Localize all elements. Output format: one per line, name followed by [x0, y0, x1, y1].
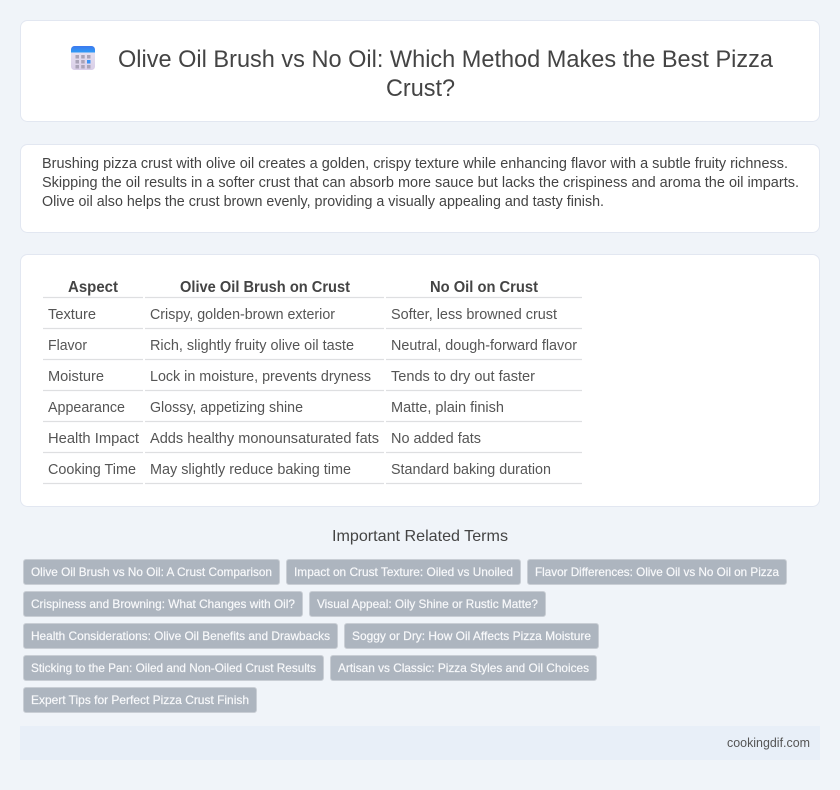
heading: important related terms: Important Related Terms — [332, 528, 508, 545]
tag: Olive Oil Brush vs No Oil: A Crust Comparison — [31, 565, 272, 579]
icon: calendar — [71, 46, 95, 70]
tag: Artisan vs Classic: Pizza Styles and Oil Choices — [338, 661, 589, 675]
title — [118, 46, 774, 102]
row: health impact — [48, 431, 481, 447]
tag — [330, 656, 596, 680]
row: appearance: Appearance — [48, 400, 125, 416]
tag: Crispiness and Browning: What Changes with Oil? — [31, 597, 295, 611]
row: flavor: Neutral, dough-forward flavor — [391, 338, 577, 354]
tag — [344, 624, 598, 648]
panel: comparison table — [20, 254, 820, 506]
row: flavor — [48, 338, 577, 354]
tag: Impact on Crust Texture: Oiled vs Unoiled — [294, 565, 513, 579]
tag group: related terms — [24, 560, 786, 712]
row: texture: Texture — [48, 307, 96, 323]
text block: description: Olive oil also helps the crust brown evenly, providing a visually appealing and tasty finish. — [42, 194, 604, 210]
row: appearance — [48, 400, 504, 416]
text block: description — [42, 156, 799, 210]
row: appearance: Matte, plain finish — [391, 400, 504, 416]
tag — [24, 560, 280, 584]
row: health impact: Adds healthy monounsaturated fats — [150, 431, 379, 447]
tag: Expert Tips for Perfect Pizza Crust Finish — [31, 693, 249, 707]
row: moisture: Tends to dry out faster — [391, 369, 535, 385]
table header: Olive Oil Brush on Crust — [180, 279, 350, 296]
row: health impact: No added fats — [391, 431, 481, 447]
tag — [24, 624, 338, 648]
row: moisture: Moisture — [48, 369, 104, 385]
tag — [310, 592, 546, 616]
tag — [24, 688, 256, 712]
row: texture: Crispy, golden-brown exterior — [150, 307, 335, 323]
row: cooking time: Standard baking duration — [391, 462, 551, 478]
row: flavor: Flavor — [48, 338, 87, 354]
row: appearance: Glossy, appetizing shine — [150, 400, 303, 416]
footer: cookingdif.com — [727, 736, 810, 750]
panel: description — [20, 144, 820, 232]
row: cooking time — [48, 462, 551, 478]
tag: Health Considerations: Olive Oil Benefits and Drawbacks — [31, 629, 330, 643]
text block: description: Skipping the oil results in a softer crust that can absorb more sauce but lacks the crispiness and aroma the oil imparts. — [42, 175, 799, 191]
row: moisture — [48, 369, 535, 385]
table header: Aspect — [68, 279, 118, 296]
text block: description: Brushing pizza crust with olive oil creates a golden, crispy texture while enhancing flavor with a subtle fruity richness. — [42, 156, 788, 172]
table header: No Oil on Crust — [430, 279, 538, 296]
tag — [528, 560, 786, 584]
tag: Visual Appeal: Oily Shine or Rustic Matte? — [317, 597, 538, 611]
row: cooking time: Cooking Time — [48, 462, 136, 478]
row: health impact: Health Impact — [48, 431, 139, 447]
tag: Sticking to the Pan: Oiled and Non-Oiled Crust Results — [31, 661, 316, 675]
footer — [20, 726, 820, 760]
tag: Soggy or Dry: How Oil Affects Pizza Moisture — [352, 629, 591, 643]
tag: Flavor Differences: Olive Oil vs No Oil on Pizza — [535, 565, 779, 579]
title: Crust? — [386, 75, 455, 102]
row: texture: Softer, less browned crust — [391, 307, 557, 323]
row: texture — [48, 307, 557, 323]
tag — [24, 592, 302, 616]
row: cooking time: May slightly reduce baking time — [150, 462, 351, 478]
title: Olive Oil Brush vs No Oil: Which Method Makes the Best Pizza — [118, 46, 774, 73]
row: moisture: Lock in moisture, prevents dryness — [150, 369, 371, 385]
tag — [24, 656, 324, 680]
row: flavor: Rich, slightly fruity olive oil taste — [150, 338, 354, 354]
panel: title header — [20, 20, 820, 122]
table header — [68, 279, 538, 296]
tag — [286, 560, 520, 584]
